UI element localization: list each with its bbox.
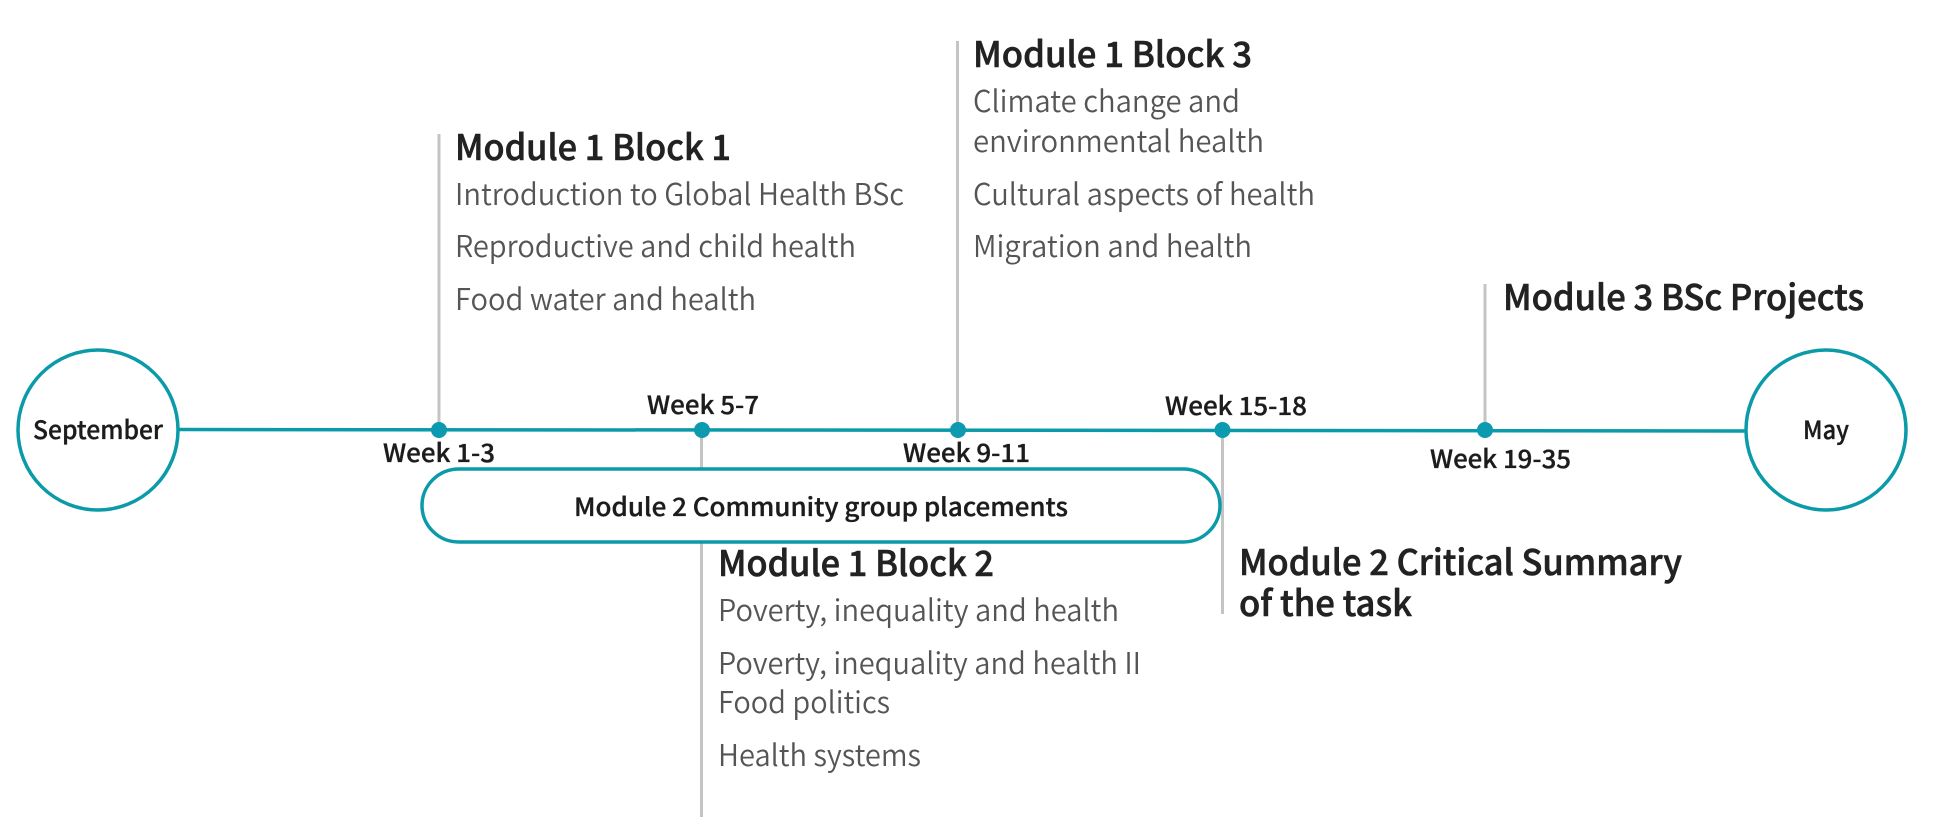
- heading: Module 2 Critical Summary: Module 2 Critical Summary: [1239, 535, 1682, 586]
- heading: Module 1 Block 1: Module 1 Block 1: [455, 120, 731, 171]
- milestone: Week 5-7: [647, 386, 759, 438]
- start marker: September: September: [33, 411, 164, 447]
- heading: of the task: of the task: [1239, 576, 1412, 627]
- end marker: May: [1746, 350, 1906, 510]
- panel: Module 1 Block 2: [702, 430, 1141, 817]
- milestone: Week 15-18: [1165, 387, 1307, 438]
- panel: Module 1 Block 1: [439, 120, 904, 430]
- end marker: May: May: [1803, 411, 1849, 447]
- heading: Module 1 Block 2: Module 1 Block 2: [718, 536, 994, 587]
- text: environmental health second line: environmental health: [973, 117, 1264, 161]
- connector: Block 3: [956, 41, 959, 430]
- pill: Module 2 Community group placements: [422, 469, 1220, 542]
- connector: Block 1: [438, 134, 440, 430]
- milestone: Week 15-18: Week 15-18: [1165, 387, 1307, 423]
- text: Reproductive and child health: Reproductive and child health: [455, 222, 856, 266]
- start marker: September: [18, 350, 178, 510]
- text: Introduction to Global Health BSc: Introduction to Global Health BSc: [455, 170, 904, 214]
- connector: Critical Summary: [1221, 430, 1224, 614]
- milestone: Week 19-35: [1430, 422, 1571, 476]
- milestone: Week 9-11: Week 9-11: [903, 434, 1030, 470]
- text: Poverty, inequality and health II: Poverty, inequality and health II: [718, 639, 1141, 683]
- timeline axis: [178, 430, 1747, 431]
- heading: Module 1 Block 3: Module 1 Block 3: [973, 27, 1252, 78]
- connector: Block 2: [700, 430, 703, 817]
- text: Cultural aspects of health: Cultural aspects of health: [973, 170, 1315, 214]
- milestone: Week 19-35: Week 19-35: [1430, 440, 1571, 476]
- text: Poverty, inequality and health: Poverty, inequality and health: [718, 586, 1119, 630]
- text: Migration and health: Migration and health: [973, 222, 1252, 266]
- connector: Module 3: [1484, 284, 1486, 430]
- text: Food politics: Food politics: [718, 678, 890, 722]
- text: Climate change and environmental health: Climate change and: [973, 77, 1240, 121]
- heading: Module 3 BSc Projects: Module 3 BSc Projects: [1503, 270, 1864, 321]
- text: Health systems: Health systems: [718, 731, 921, 775]
- milestone: Week 5-7: Week 5-7: [647, 386, 759, 422]
- text: Food water and health: Food water and health: [455, 275, 756, 319]
- panel: Module 2 Critical Summary: [1222, 430, 1682, 627]
- pill: Module 2 Community group placements: Module 2 Community group placements: [574, 488, 1068, 524]
- milestone: Week 1-3: Week 1-3: [383, 434, 495, 470]
- panel: Module 1 Block 3: [958, 27, 1315, 430]
